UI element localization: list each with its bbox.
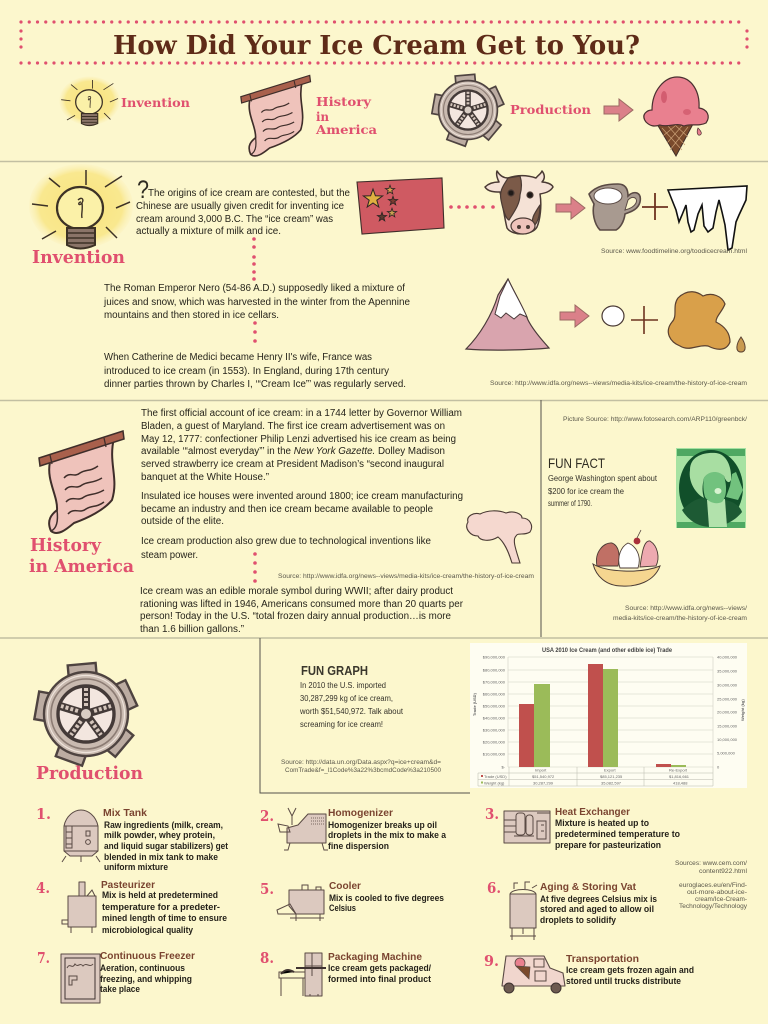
right axis: 5,000,000 (717, 750, 736, 756)
data table: 30,287,299 (533, 780, 554, 786)
text: imports: worth $51,540,972. Talk about (299, 707, 404, 716)
step 1: mix tank (36, 805, 229, 873)
icon: small scroll (241, 75, 311, 156)
data table (478, 767, 713, 786)
sources for production: cream/Ice-Cream- (695, 897, 747, 903)
text: WWII and today: rationing was lifted in 1946, Americans consumed more than 20 quarts per (140, 599, 464, 610)
step 5: cooler: Mix is cooled to five degrees (329, 893, 444, 904)
text: Washington: George Washington spent about (548, 474, 658, 483)
text: first accounts (141, 408, 462, 483)
left axis: $20,000,000 (483, 740, 506, 744)
data table: Import (535, 768, 547, 772)
right axis: 15,000,000 (717, 724, 738, 728)
left axis: $- (501, 764, 506, 770)
text: first accounts: The first official account of ice cream: in a 1744 letter by Governor William (141, 408, 462, 419)
text: ice houses (141, 491, 463, 527)
title: How Did Your Ice Cream Get to You? (113, 31, 640, 61)
right axis (717, 654, 738, 770)
source: Source: http://www.idfa.org/news--views/media-kits/ice-cream/the-history-of-ice-cream (278, 574, 534, 580)
arrow to ice cream (604, 99, 633, 121)
text: Chinese origins: actually a mixture of milk and ice. (136, 226, 281, 237)
text: Chinese origins: Chinese are usually given credit for inventing ice (136, 201, 344, 212)
step 5: cooler (260, 880, 444, 921)
text: Washington: $200 for ice cream the (548, 487, 625, 496)
panel: production steps (36, 805, 747, 1003)
step 8: packaging machine (260, 949, 432, 996)
step 2: homogenizer: Homogenizer breaks up oil (328, 820, 437, 831)
text: Washington: summer of 1790. (548, 499, 592, 508)
right axis: 0 (717, 764, 720, 770)
step 7: continuous freezer: take place (100, 984, 140, 995)
step 8: packaging machine: formed into final product (328, 974, 432, 985)
sources for production: out-more-about-ice- (687, 890, 747, 896)
icon: Chinese flag (357, 178, 444, 234)
text: Catherine de Medici: When Catherine de Medici became Henry II's wife, France was (104, 352, 372, 363)
step 9: transportation: Ice cream gets frozen again and (566, 965, 694, 976)
text: first accounts: May 12, 1777: confectioner Philip Lenzi advertised his ice cream as being (141, 434, 456, 445)
panel: history in America (29, 408, 534, 635)
text: Washington (548, 474, 658, 508)
panel: fun graph text (281, 664, 442, 774)
heading: FUN GRAPH: FUN GRAPH (301, 664, 368, 678)
data table: 35,082,597 (601, 780, 622, 786)
text: imports: In 2010 the U.S. imported (300, 681, 386, 690)
plus sign (642, 193, 668, 220)
data table: Re-Export (669, 768, 688, 772)
step 1: mix tank: and liquid sugar stabilizers) get (104, 841, 229, 852)
sources for production: euroglaces.eu/en/Find- (679, 883, 747, 889)
arrow (556, 197, 585, 219)
text: ice houses: became an industry and then ice cream became available to people (141, 504, 433, 515)
right axis: 25,000,000 (717, 696, 738, 702)
source: ComTrade&f=_l1Code%3a22%3bcmdCode%3a210500 (285, 768, 442, 774)
step 2: homogenizer (260, 807, 447, 852)
bars (519, 664, 686, 767)
step 6: aging and storing vat: stored and aged to allow oil (540, 904, 654, 915)
step 8: packaging machine: Packaging Machine (328, 951, 422, 963)
step 4: pasteurizer: microbiological quality (102, 925, 194, 936)
icon: ice cream cone (644, 77, 708, 156)
step 6: aging and storing vat: Aging & Storing Vat (540, 881, 636, 893)
section dividers (0, 162, 768, 793)
right axis: 40,000,000 (717, 654, 738, 660)
text: ice houses: Insulated ice houses were invented around 1800; ice cream manufacturing (141, 491, 463, 502)
text: Chinese origins (136, 188, 350, 237)
step 6: aging and storing vat: 6. (487, 879, 501, 897)
data table: 418,488 (673, 780, 688, 786)
text: first accounts: served strawberry ice cream at President Madison’s “second inaugural (141, 459, 444, 470)
left axis: $50,000,000 (483, 704, 506, 708)
icon: large light bulb (29, 164, 133, 248)
text: first accounts: banquet at the White House.” (141, 472, 269, 483)
icon: George Washington dollar portrait (676, 448, 746, 528)
dotted connector (252, 237, 256, 281)
step 5: cooler: Celsius (329, 903, 356, 914)
step 3: heat exchanger: Heat Exchanger (555, 806, 630, 818)
text: imports (299, 681, 404, 729)
icon: milk jug (589, 184, 640, 230)
sources for production (675, 861, 747, 910)
icon: ice cream sundae (593, 530, 660, 586)
text: Emperor Nero: The Roman Emperor Nero (54-86 A.D.) supposedly liked a mixture of (104, 283, 405, 294)
step 1: mix tank: Raw ingredients (milk, cream, (104, 820, 223, 831)
source (613, 606, 747, 622)
icon: fruit juice splat (668, 292, 730, 349)
right axis title: Weight (kg) (740, 699, 745, 721)
icon: snowball (602, 306, 624, 326)
step 3: heat exchanger: predetermined temperature to (555, 829, 680, 840)
left axis: $10,000,000 (483, 752, 506, 756)
panel: table of contents (59, 74, 708, 156)
icon: small gear (432, 74, 504, 146)
text: Chinese origins: cream around 3,000 B.C. The “ice cream” was (136, 214, 333, 225)
text: WWII and today: Ice cream was an edible morale symbol during WWII; after dairy product (140, 586, 453, 597)
icon: snowy mountain (466, 279, 549, 350)
dotted title frame (21, 22, 747, 63)
text: steam power: Ice cream production also grew due to technological inventions like (141, 536, 431, 547)
gridlines (508, 657, 713, 767)
step 1: mix tank: 1. (36, 805, 51, 823)
text: first accounts: available ‘“almost everyday”’ in the New York Gazette. Dolley Madison (141, 446, 445, 457)
text: WWII and today: person! Today in the U.S. “total frozen dairy annual production…is more (140, 611, 451, 622)
text: imports: screaming for ice cream! (300, 720, 383, 729)
step 3: heat exchanger (485, 805, 680, 851)
left axis (483, 654, 506, 770)
text: ice houses: outside of the elite. (141, 516, 224, 527)
icon: large scroll (39, 431, 124, 533)
step 6: aging and storing vat: At five degrees Celsius mix is (540, 894, 657, 905)
step 8: packaging machine: Ice cream gets packaged/ (328, 963, 431, 974)
step 2: homogenizer: Homogenizer (328, 807, 393, 819)
text: steam power (141, 536, 431, 561)
text: Emperor Nero (103, 283, 410, 321)
sources for production: Sources: www.cem.com/ (675, 861, 747, 867)
step 4: pasteurizer: Pasteurizer (101, 879, 155, 891)
heading: History in America: in America (29, 556, 134, 577)
left axis: $90,000,000 (483, 654, 506, 660)
source: media-kits/ice-cream/the-history-of-ice-cream (613, 616, 747, 622)
text: Catherine de Medici (104, 352, 406, 390)
step 3: heat exchanger: prepare for pasteurization (555, 840, 661, 851)
step 7: continuous freezer: freezing, and whipping (100, 974, 192, 985)
text: WWII and today (140, 586, 464, 635)
step 2: homogenizer: fine dispersion (328, 841, 389, 852)
label: Production: Production (510, 103, 591, 117)
panel: invention (29, 164, 747, 390)
data table: $1,816,661 (669, 774, 690, 779)
data table: Export (604, 768, 616, 772)
label: History in America (315, 95, 377, 137)
right axis: 35,000,000 (717, 668, 738, 674)
data table: $51,540,972 (532, 774, 555, 779)
left axis title: Trade (USD) (472, 692, 477, 716)
data table: Trade (USD) (484, 774, 507, 779)
icon: icicles (668, 186, 747, 250)
step 1: mix tank: uniform mixture (104, 862, 168, 873)
icon: cow (485, 171, 553, 234)
dotted connector (253, 552, 257, 583)
step 6: aging and storing vat (487, 879, 657, 940)
step 9: transportation: stored until trucks distribute (566, 976, 681, 987)
step 8: packaging machine: 8. (260, 949, 274, 967)
sources for production: content922.html (699, 869, 747, 875)
step 5: cooler: Cooler (329, 880, 361, 892)
step 4: pasteurizer (36, 879, 227, 936)
step 7: continuous freezer (37, 949, 195, 1003)
panel: fun fact (548, 417, 747, 622)
heading: Production: Production (36, 763, 143, 784)
dotted connector (253, 321, 257, 343)
heading: Invention: Invention (32, 247, 125, 268)
step 2: homogenizer: 2. (260, 807, 274, 825)
text: imports: 30,287,299 kg of ice cream, (300, 694, 393, 703)
text: Emperor Nero: mountains and then stored in ice cellars. (104, 310, 279, 321)
source: Source: www.foodtimeline.org/toodicecream.html (601, 249, 747, 255)
step 5: cooler: 5. (260, 880, 274, 898)
step 1: mix tank: Mix Tank (103, 807, 147, 819)
heading: History in America: History (30, 535, 102, 556)
arrow (560, 305, 589, 327)
label: History in America: America (315, 123, 377, 137)
step 9: transportation: Transportation (566, 953, 639, 965)
left axis: $30,000,000 (483, 728, 506, 732)
left axis: $40,000,000 (483, 716, 506, 720)
step 1: mix tank: milk powder, whey protein, (104, 830, 215, 841)
picture source: Picture Source: http://www.fotosearch.com/ARP110/greenbck/ (563, 417, 747, 423)
text: Catherine de Medici: dinner parties thrown by Charles I, ‘“Cream Ice”’ was regularly served. (104, 379, 406, 390)
step 7: continuous freezer: 7. (37, 949, 50, 967)
sources for production: Technology/Technology (679, 904, 747, 910)
right axis: 20,000,000 (717, 710, 738, 714)
heading: History in America (29, 535, 134, 577)
data table: $85,121,235 (600, 774, 623, 779)
icon: steam cloud (467, 511, 532, 563)
icon: small light bulb (59, 76, 120, 125)
left axis: $70,000,000 (483, 680, 506, 684)
step 3: heat exchanger: 3. (485, 805, 499, 823)
dotted link flag to cow (449, 205, 495, 209)
text: Chinese origins: The origins of ice cream are contested, but the (148, 188, 350, 199)
step 7: continuous freezer: Continuous Freezer (100, 950, 195, 962)
right axis: 30,000,000 (717, 682, 738, 688)
step 4: pasteurizer: temperature for a predeter- (102, 902, 220, 913)
left axis: $60,000,000 (483, 692, 506, 696)
panel: production heading (34, 663, 143, 784)
source: Source: http://data.un.org/Data.aspx?q=ice+cream&d= (281, 760, 442, 766)
question mark: ? (137, 176, 149, 204)
text: Emperor Nero: juices and snow, which was harvested in the winter from the Apennine (103, 297, 410, 308)
step 1: mix tank: blended in mix tank to make (104, 852, 218, 863)
step 9: transportation (484, 952, 694, 993)
chart title: USA 2010 Ice Cream (and other edible ice) Trade (542, 648, 673, 654)
source (281, 760, 442, 774)
step 4: pasteurizer: 4. (36, 879, 50, 897)
step 9: transportation: 9. (484, 952, 499, 970)
heading: FUN FACT: FUN FACT (548, 455, 605, 471)
text: WWII and today: than 1.6 billion gallons.” (140, 624, 244, 635)
text: steam power: steam power. (141, 550, 198, 561)
step 4: pasteurizer: Mix is held at predetermined (102, 890, 218, 901)
icon: juice drop (737, 337, 745, 352)
step 3: heat exchanger: Mixture is heated up to (555, 818, 649, 829)
bar chart: USA 2010 ice cream trade (470, 643, 747, 788)
right axis: 10,000,000 (717, 737, 738, 742)
step 7: continuous freezer: Aeration, continuous (100, 963, 185, 974)
icon: large gear (34, 663, 137, 766)
source: Source: http://www.idfa.org/news--views/media-kits/ice-cream/the-history-of-ice-cream (490, 381, 747, 387)
label: Invention: Invention (121, 96, 190, 110)
source: Source: http://www.idfa.org/news--views/ (625, 606, 747, 612)
left axis: $80,000,000 (483, 668, 506, 672)
data table: Weight (kg) (484, 780, 505, 786)
label: History in America: in (316, 110, 329, 124)
plus sign (631, 306, 658, 334)
step 6: aging and storing vat: droplets to solidify (540, 915, 617, 926)
step 2: homogenizer: droplets in the mix to make a (328, 830, 447, 841)
step 4: pasteurizer: mined length of time to ensure (102, 913, 227, 924)
label: History in America: History (316, 95, 372, 109)
text: first accounts: Bladen, a guest of Maryland. The first ice cream advertisement was on (141, 421, 445, 432)
text: Catherine de Medici: introduced to ice cream (in 1553). In England, during 17th century (104, 366, 389, 377)
